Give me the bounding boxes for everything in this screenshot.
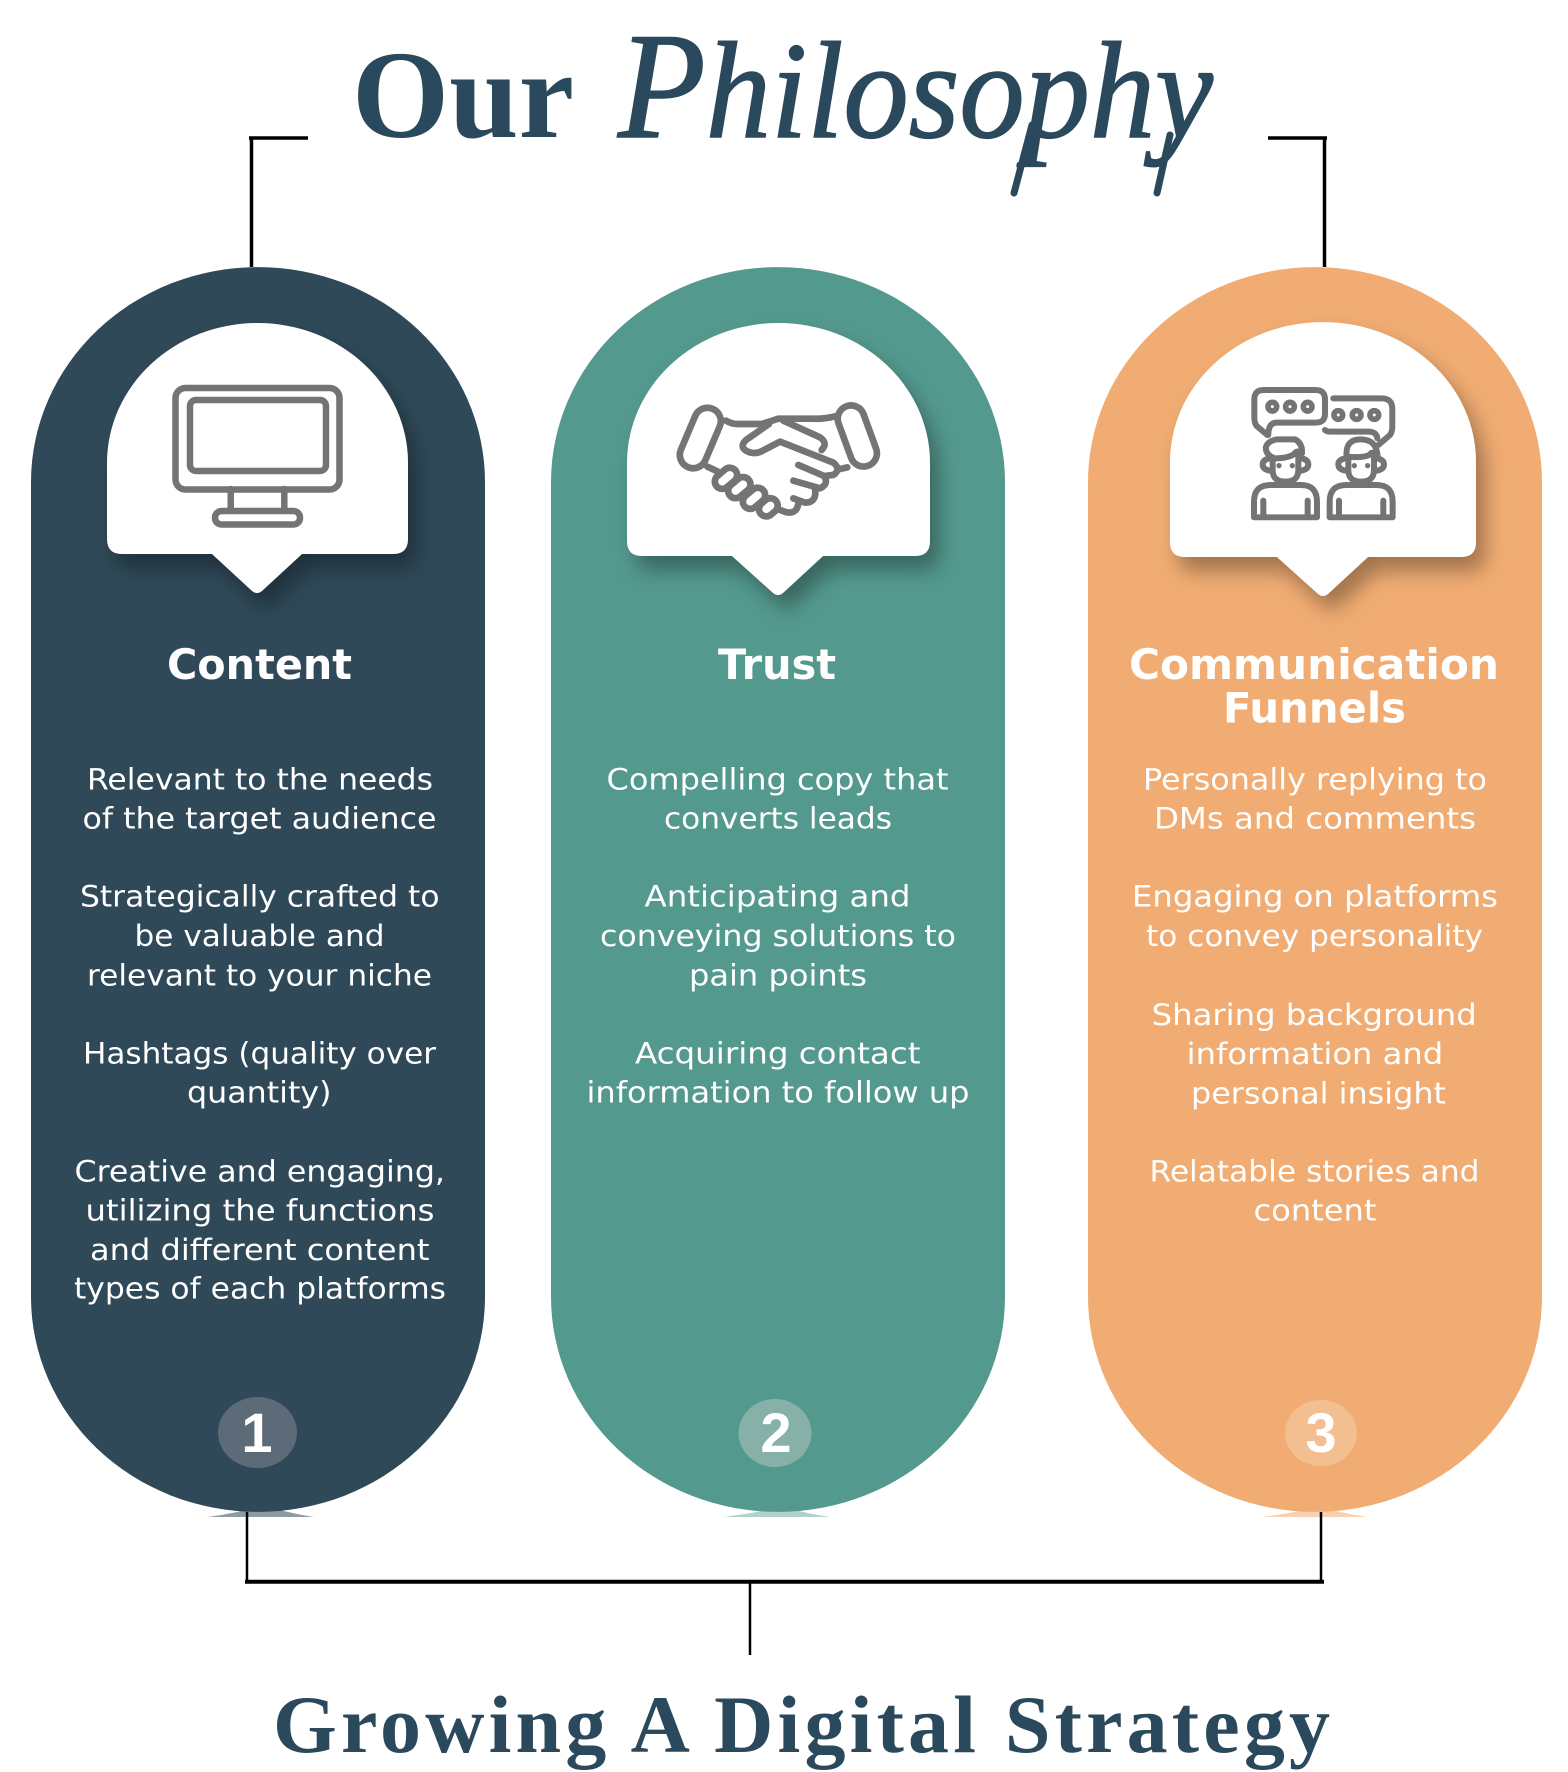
text block: content points: quantity) bbox=[187, 1075, 332, 1109]
pill background bbox=[31, 267, 485, 1512]
text block: content points: Creative and engaging, bbox=[74, 1154, 445, 1188]
text block: content points: relevant to your niche bbox=[87, 958, 432, 992]
text block: trust points: information to follow up bbox=[586, 1075, 970, 1109]
heading: Content: Content bbox=[167, 640, 352, 689]
text block: communication points: to convey personality bbox=[1146, 919, 1483, 953]
panel: trust bbox=[551, 267, 1005, 1517]
text block: content points: Strategically crafted to bbox=[80, 880, 440, 914]
top bracket: left bbox=[249, 138, 308, 267]
callout bubble bbox=[107, 323, 408, 593]
text block: communication points: DMs and comments bbox=[1154, 801, 1476, 835]
text block: trust points: Anticipating and bbox=[644, 880, 910, 914]
footer heading: Growing A Digital Strategy: Growing A Digital Strategy bbox=[273, 1679, 1330, 1770]
text block: communication points: Relatable stories and bbox=[1150, 1154, 1480, 1188]
number badge 1: 1 bbox=[241, 1401, 273, 1464]
panel: content bbox=[31, 267, 485, 1517]
number badge 2 bbox=[738, 1399, 812, 1467]
text block: communication points: Personally replying to bbox=[1143, 762, 1487, 796]
bottom bracket bbox=[245, 1512, 1324, 1655]
callout bubble bbox=[627, 323, 930, 595]
text block: communication points: personal insight bbox=[1191, 1076, 1446, 1110]
text block: communication points: Sharing background bbox=[1152, 998, 1477, 1032]
text block: communication points bbox=[1132, 762, 1498, 1228]
pill background bbox=[551, 267, 1005, 1512]
heading: Trust: Trust bbox=[718, 640, 836, 689]
icon: handshake bbox=[676, 402, 881, 519]
title word: Our: Our bbox=[352, 27, 574, 165]
number badge 3: 3 bbox=[1305, 1401, 1337, 1464]
text block: communication points: information and bbox=[1187, 1037, 1443, 1071]
text block: trust points: pain points bbox=[689, 958, 867, 992]
icon: two people talking bbox=[1254, 390, 1393, 517]
text block: communication points: content bbox=[1254, 1194, 1376, 1228]
number badge 2: 2 bbox=[760, 1401, 792, 1464]
title word: Philosophy: Philosophy bbox=[617, 2, 1214, 170]
number badge 3 bbox=[1285, 1400, 1357, 1466]
text block: content points: utilizing the functions bbox=[86, 1194, 434, 1228]
text block: trust points: Compelling copy that bbox=[606, 762, 948, 796]
text block: communication points: Engaging on platforms bbox=[1132, 880, 1498, 914]
heading: Communication Funnels bbox=[1129, 640, 1499, 733]
pill shadow bbox=[1262, 1510, 1368, 1517]
text block: trust points: conveying solutions to bbox=[600, 919, 956, 953]
text block: content points: Hashtags (quality over bbox=[83, 1036, 436, 1070]
number badge 1 bbox=[218, 1397, 297, 1468]
title flourish: long descenders bbox=[1014, 125, 1170, 193]
top bracket: right bbox=[1268, 138, 1327, 267]
text block: content points: of the target audience bbox=[82, 801, 436, 835]
text block: content points: and different content bbox=[90, 1233, 430, 1267]
text block: trust points bbox=[586, 762, 970, 1109]
pill background bbox=[1088, 267, 1542, 1512]
pill shadow bbox=[724, 1510, 830, 1517]
text block: content points bbox=[74, 762, 446, 1306]
text block: content points: types of each platforms bbox=[74, 1272, 446, 1306]
panel: communication funnels bbox=[1088, 267, 1542, 1517]
heading: Communication Funnels: Communication bbox=[1129, 640, 1499, 689]
title: Our Philosophy bbox=[352, 2, 1214, 193]
heading: Communication Funnels: Funnels bbox=[1223, 684, 1406, 733]
callout bubble bbox=[1170, 322, 1476, 596]
text block: trust points: converts leads bbox=[664, 801, 892, 835]
text block: content points: be valuable and bbox=[134, 919, 384, 953]
icon: monitor bbox=[176, 388, 340, 524]
pill shadow bbox=[208, 1510, 314, 1517]
text block: trust points: Acquiring contact bbox=[635, 1036, 920, 1070]
text block: content points: Relevant to the needs bbox=[87, 762, 433, 796]
